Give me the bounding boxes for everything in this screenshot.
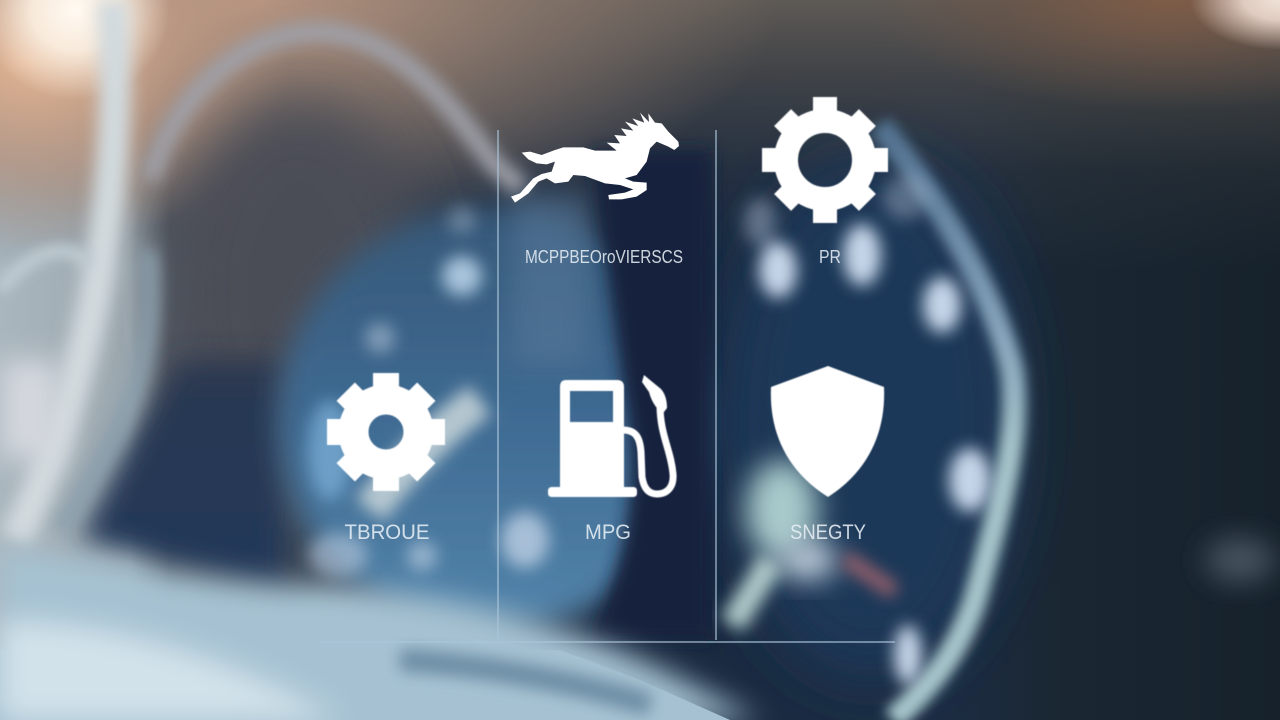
panel: power [762,97,888,267]
label: horsepower: MCPPBEOroVIERSCS [525,247,683,267]
icon: fuel pump [548,375,673,497]
icon: galloping horse [511,113,679,203]
icon: shield [771,366,884,497]
panel: horsepower [511,113,683,267]
icon: gear [762,97,888,223]
label: power: PR [819,247,841,267]
label: MPG: MPG [585,521,631,544]
label: torque: TBROUE [344,521,430,544]
icon: torque gear [327,373,445,491]
panel: safety [771,366,884,544]
label: safety: SNEGTY [790,521,866,544]
grid divider lines [320,130,895,642]
panel: fuel economy [548,375,673,544]
panel: torque [327,373,445,544]
